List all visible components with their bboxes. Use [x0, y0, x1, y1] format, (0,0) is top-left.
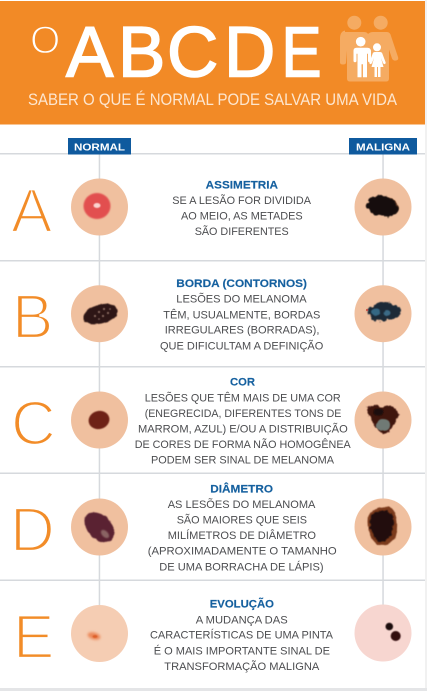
description B	[160, 278, 323, 352]
description D: (APROXIMADAMENTE O TAMANHO	[148, 546, 337, 558]
photo: normal lesion B	[71, 285, 128, 342]
description A: SÃO DIFERENTES	[195, 225, 289, 238]
description A: SE A LESÃO FOR DIVIDIDA	[172, 194, 311, 207]
description D: SÃO MAIORES QUE SEIS	[177, 514, 307, 527]
description D: DIÂMETRO	[210, 482, 273, 495]
column label: MALIGNA	[349, 138, 417, 154]
description B: QUE DIFICULTAM A DEFINIÇÃO	[160, 339, 323, 352]
description C: DE CORES DE FORMA NÃO HOMOGÊNEA	[135, 438, 351, 451]
letter C: C	[11, 390, 56, 458]
description C: MARROM, AZUL) E/OU A DISTRIBUIÇÃO	[138, 423, 348, 436]
description A: ASSIMETRIA	[206, 179, 278, 191]
letter E: E	[13, 603, 54, 672]
description D: AS LESÕES DO MELANOMA	[168, 498, 316, 511]
description C: LESÕES QUE TÊM MAIS DE UMA COR	[145, 391, 341, 404]
photo: normal lesion D	[71, 498, 128, 556]
description C: PODEM SER SINAL DE MELANOMA	[151, 455, 334, 467]
letter B: B	[12, 283, 53, 352]
description C: (ENEGRECIDA, DIFERENTES TONS DE	[145, 408, 342, 420]
description E: EVOLUÇÃO	[210, 598, 274, 611]
description E: É O MAIS IMPORTANTE SINAL DE	[154, 644, 330, 657]
description B: BORDA (CONTORNOS)	[176, 278, 307, 290]
description E: CARACTERÍSTICAS DE UMA PINTA	[150, 629, 333, 642]
photo: normal lesion A	[71, 178, 128, 236]
description D: MILÍMETROS DE DIÂMETRO	[168, 529, 316, 542]
photo: malignant lesion A	[354, 178, 412, 236]
description A: AO MEIO, AS METADES	[181, 210, 303, 222]
title: O ABCDE: E	[282, 14, 322, 92]
row A: asymmetry	[11, 177, 412, 246]
grid lines	[0, 153, 425, 634]
description E: A MUDANÇA DAS	[196, 614, 288, 626]
description E: TRANSFORMAÇÃO MALIGNA	[164, 660, 320, 673]
description D: DE UMA BORRACHA DE LÁPIS)	[159, 560, 324, 573]
photo: malignant lesion D	[354, 498, 412, 556]
header banner	[0, 1, 425, 124]
letter D: D	[10, 496, 55, 565]
photo: normal lesion E	[71, 605, 128, 662]
title: O ABCDE: ABCD	[66, 14, 275, 92]
description B: TÊM, USUALMENTE, BORDAS	[163, 308, 321, 321]
row E: evolution	[13, 598, 412, 673]
photo: malignant lesion B	[354, 285, 412, 342]
description B: LESÕES DO MELANOMA	[176, 293, 307, 306]
column label: NORMAL	[68, 138, 131, 154]
column label: MALIGNA: MALIGNA	[356, 141, 410, 153]
row D: diameter	[10, 482, 412, 573]
description D	[148, 482, 337, 573]
row C: color	[11, 377, 412, 467]
photo: normal lesion C	[71, 392, 128, 448]
row B: border	[12, 278, 412, 352]
letter A: A	[11, 177, 53, 246]
icon: family	[340, 16, 398, 82]
column label: NORMAL: NORMAL	[74, 141, 126, 153]
photo: malignant lesion E	[354, 604, 412, 662]
description C: COR	[230, 377, 255, 389]
description C	[135, 377, 351, 467]
description B: IRREGULARES (BORRADAS),	[165, 325, 319, 337]
description E	[150, 598, 333, 673]
title: O ABCDE: O	[30, 19, 60, 62]
description A	[172, 179, 311, 238]
photo: malignant lesion C	[354, 392, 412, 448]
subtitle: SABER O QUE É NORMAL PODE SALVAR UMA VIDA	[28, 90, 397, 109]
